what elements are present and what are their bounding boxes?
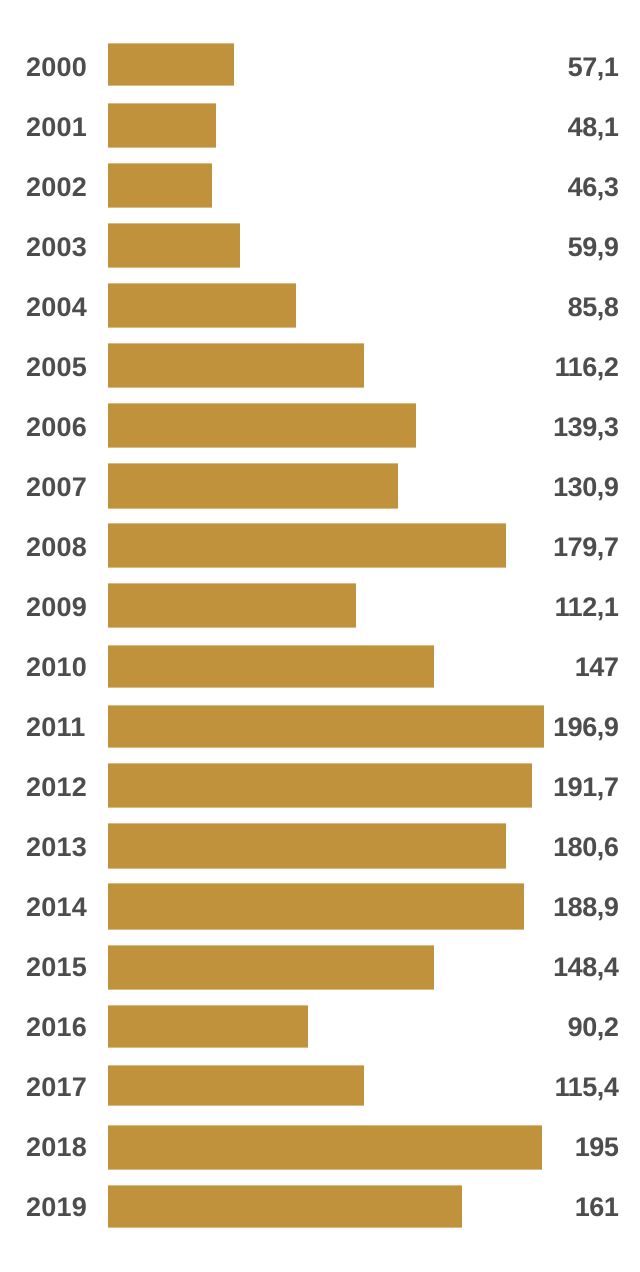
row: 2011 xyxy=(26,705,618,748)
row: 2006 xyxy=(26,403,618,448)
row: 2018: 2018 xyxy=(26,1132,87,1162)
row: 2015 xyxy=(26,945,619,990)
row: 2008: 2008 xyxy=(26,532,87,562)
row: 2005: 116,2 xyxy=(555,352,618,382)
row: 2007 xyxy=(26,463,618,509)
row: 2018 xyxy=(26,1125,618,1170)
row: 2014: 2014 xyxy=(26,892,87,922)
row: 2012: 2012 xyxy=(26,772,87,802)
row: 2015: 2015 xyxy=(26,952,87,982)
row: 2006: 2006 xyxy=(26,412,87,442)
row: 2006: 139,3 xyxy=(553,412,618,442)
row: 2012 xyxy=(26,763,618,808)
row: 2019: 2019 xyxy=(26,1192,87,1222)
row: 2013 xyxy=(26,823,618,869)
row: 2001 xyxy=(26,103,618,148)
row: 2004: 2004 xyxy=(26,292,87,322)
row: 2013: 2013 xyxy=(26,832,87,862)
row: 2008 xyxy=(26,523,618,568)
row: 2005: 2005 xyxy=(26,352,87,382)
row: 2014: 188,9 xyxy=(553,892,618,922)
row: 2003: 59,9 xyxy=(568,232,618,262)
row: 2013: 180,6 xyxy=(553,832,618,862)
row: 2002: 46,3 xyxy=(568,172,618,202)
row: 2017: 2017 xyxy=(26,1072,87,1102)
row: 2016: 90,2 xyxy=(568,1012,618,1042)
row: 2010: 147 xyxy=(575,652,618,682)
row: 2016 xyxy=(26,1005,618,1048)
row: 2004 xyxy=(26,283,618,328)
row: 2017 xyxy=(26,1065,619,1106)
row: 2007: 130,9 xyxy=(553,472,618,502)
row: 2000: 2000 xyxy=(26,52,87,82)
row: 2009: 112,1 xyxy=(555,592,618,622)
row: 2019: 161 xyxy=(575,1192,618,1222)
row: 2011: 196,9 xyxy=(553,712,618,742)
row: 2003 xyxy=(26,223,618,268)
row: 2002 xyxy=(26,163,618,208)
row: 2002: 2002 xyxy=(26,172,87,202)
row: 2018: 195 xyxy=(575,1132,618,1162)
row: 2000: 57,1 xyxy=(568,52,618,82)
row: 2001: 2001 xyxy=(26,112,87,142)
row: 2001: 48,1 xyxy=(568,112,618,142)
row: 2017: 115,4 xyxy=(555,1072,618,1102)
row: 2010: 2010 xyxy=(26,652,87,682)
row: 2003: 2003 xyxy=(26,232,87,262)
row: 2005 xyxy=(26,343,618,388)
row: 2014 xyxy=(26,883,618,930)
row: 2004: 85,8 xyxy=(568,292,618,322)
row: 2019 xyxy=(26,1185,618,1228)
row: 2009: 2009 xyxy=(26,592,87,622)
row: 2008: 179,7 xyxy=(553,532,618,562)
row: 2012: 191,7 xyxy=(553,772,618,802)
row: 2015: 148,4 xyxy=(553,952,618,982)
row: 2007: 2007 xyxy=(26,472,87,502)
row: 2011: 2011 xyxy=(26,712,86,742)
row: 2016: 2016 xyxy=(26,1012,87,1042)
row: 2010 xyxy=(26,645,618,688)
row: 2009 xyxy=(26,583,618,628)
row: 2000 xyxy=(26,43,618,86)
